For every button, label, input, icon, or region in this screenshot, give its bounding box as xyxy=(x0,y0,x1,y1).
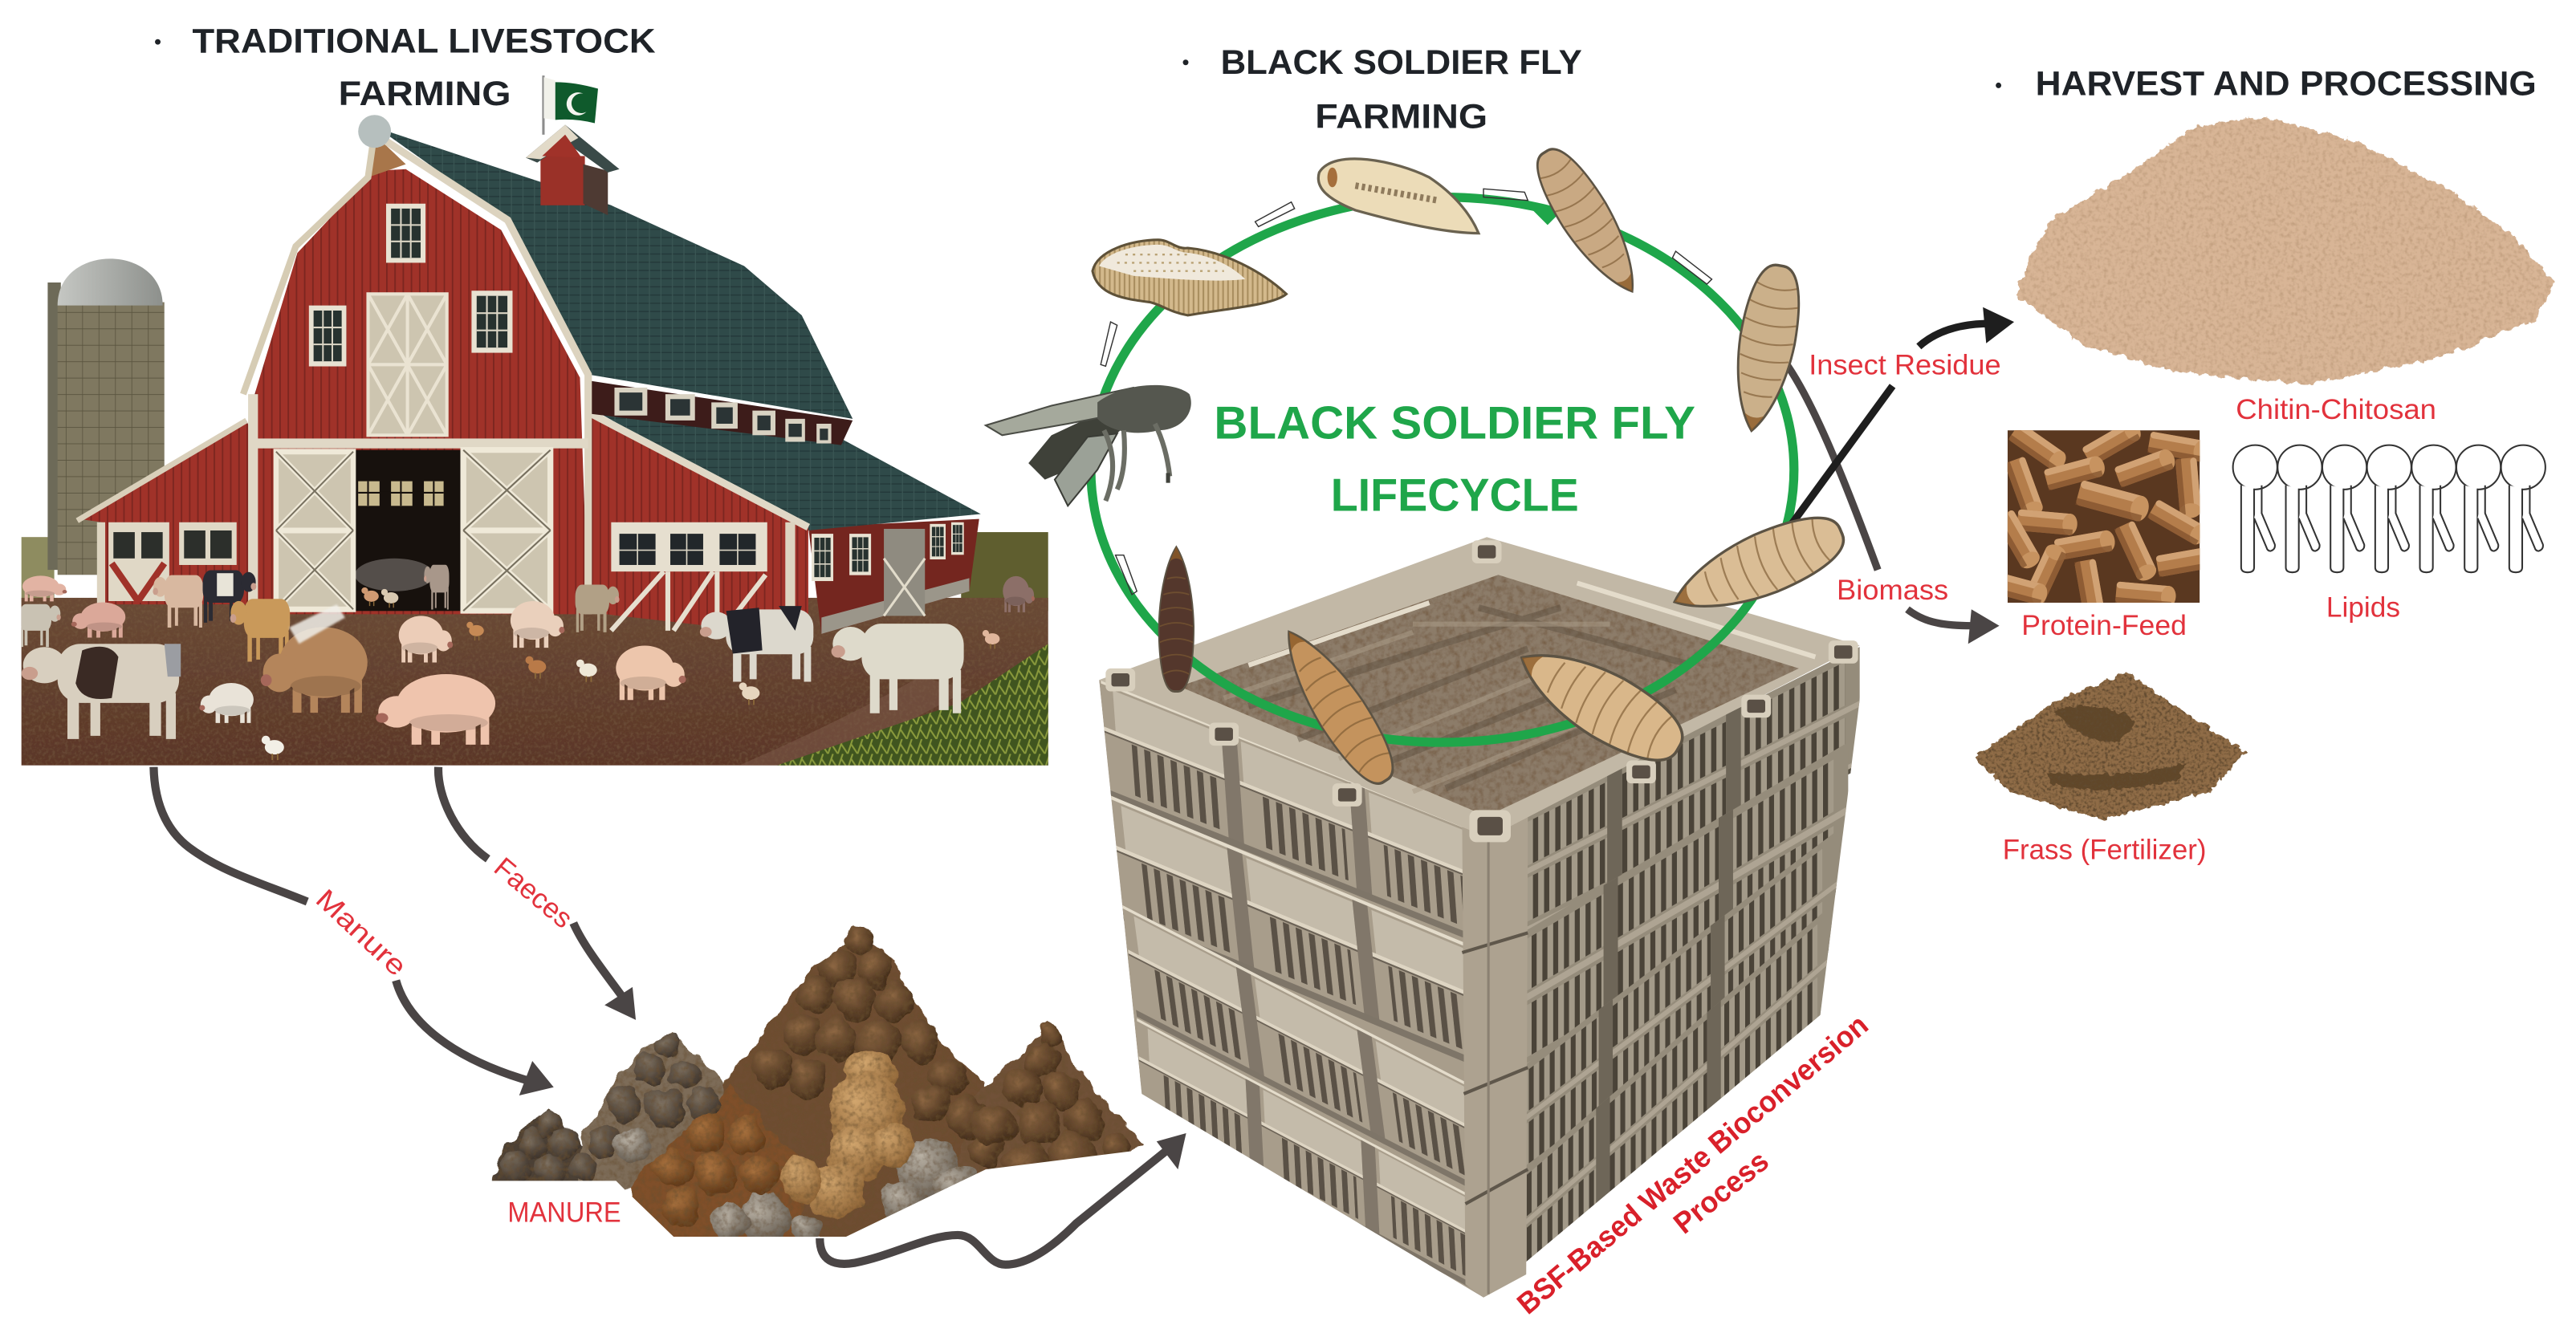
crate left face layers xyxy=(1099,647,1860,1319)
label: Manure: Manure xyxy=(310,884,412,982)
farm animals xyxy=(20,565,1035,760)
crate top rim and soil xyxy=(1099,537,1860,838)
panel: traditional livestock farm scene xyxy=(20,115,1048,766)
label: Chitin-Chitosan: Chitin-Chitosan xyxy=(2236,395,2436,425)
label: Insect Residue: Insect Residue xyxy=(1809,351,2001,381)
fields and farmyard ground xyxy=(22,532,1048,766)
arrow: manure from farm to pile xyxy=(153,767,554,1095)
dormer window strip xyxy=(592,381,853,445)
BSF crate stack xyxy=(1099,537,1860,1319)
label: Protein-Feed: Protein-Feed xyxy=(2021,611,2187,641)
lipid molecules xyxy=(2233,445,2545,572)
lifecycle stage: first instar larva xyxy=(1318,159,1479,234)
silo xyxy=(47,258,165,575)
label: Frass (Fertilizer): Frass (Fertilizer) xyxy=(2003,835,2206,865)
lifecycle stage: adult fly xyxy=(986,385,1191,506)
label: Lipids: Lipids xyxy=(2326,592,2400,623)
frass fertilizer pile xyxy=(1975,672,2246,819)
title: black soldier fly lifecycle: LIFECYCLE xyxy=(1331,469,1579,521)
barn front gable xyxy=(243,115,588,614)
barn right wing xyxy=(592,411,981,637)
chitin-chitosan powder pile xyxy=(2016,116,2554,384)
title: black soldier fly lifecycle: BLACK SOLDIER FLY xyxy=(1214,397,1695,449)
lifecycle stage: second larva xyxy=(1524,139,1653,304)
heading: harvest and processing: HARVEST AND PROCESSING xyxy=(2036,65,2537,104)
label: BSF-Based Waste Bioconversion Process: BSF-Based Waste Bioconversion xyxy=(1511,1008,1874,1320)
arrow: insect residue stream xyxy=(1786,307,2014,532)
heading: traditional livestock farming: TRADITIONAL LIVESTOCK xyxy=(193,22,656,60)
lifecycle stage: egg mass xyxy=(1093,240,1286,315)
heading: traditional livestock farming xyxy=(155,22,656,113)
lifecycle stage: third larva xyxy=(1724,261,1808,436)
lifecycle stage: fourth larva xyxy=(1662,503,1853,630)
label: MANURE: MANURE xyxy=(507,1198,621,1229)
label: BSF-Based Waste Bioconversion Process: Process xyxy=(1667,1144,1775,1240)
lifecycle stage: fifth larva xyxy=(1505,629,1695,777)
heading: black soldier fly farming xyxy=(1183,43,1582,136)
cupola xyxy=(526,125,620,215)
lifecycle stage: pupa xyxy=(1268,619,1406,794)
heading: traditional livestock farming: FARMING xyxy=(339,75,511,113)
lifecycle stage: dark prepupa xyxy=(1159,547,1194,692)
title: black soldier fly lifecycle xyxy=(1214,397,1695,521)
barn main roof xyxy=(378,128,853,419)
protein feed pellets xyxy=(2007,430,2200,603)
label: Faeces: Faeces xyxy=(488,852,578,934)
manure piles xyxy=(490,928,1147,1257)
heading: black soldier fly farming: FARMING xyxy=(1315,98,1487,136)
arrow: faeces from farm to pile xyxy=(438,767,636,1020)
heading: black soldier fly farming: BLACK SOLDIER FLY xyxy=(1221,43,1582,82)
lifecycle ring xyxy=(1091,189,1794,742)
arrow: manure to BSF crates xyxy=(820,1133,1186,1265)
crate front corner post xyxy=(1462,813,1528,1298)
barn left wing xyxy=(77,421,256,604)
arrow: biomass stream xyxy=(1780,356,2000,644)
label: Biomass: Biomass xyxy=(1837,575,1948,606)
icon: Pakistan flag xyxy=(542,75,598,135)
